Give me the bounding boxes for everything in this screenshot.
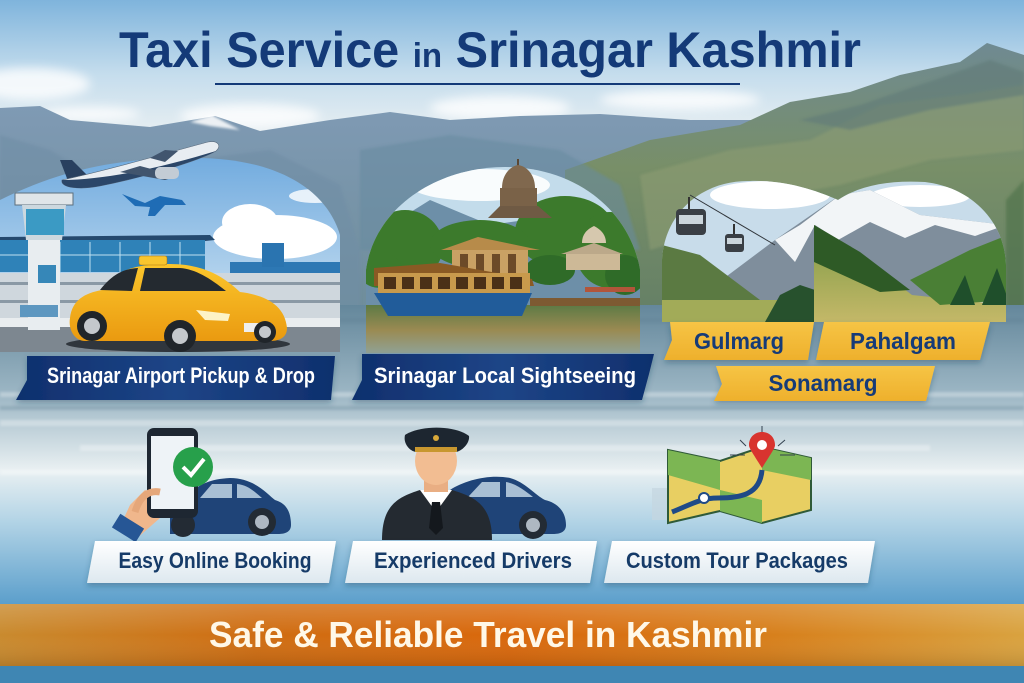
label: custom tour packages: Custom Tour Packages	[626, 548, 848, 573]
panel: hill stations	[660, 175, 1010, 401]
feature: online booking	[87, 428, 336, 583]
label: sightseeing: Srinagar Local Sightseeing	[374, 363, 636, 388]
label: easy online booking: Easy Online Booking	[118, 548, 312, 573]
icon: blue car	[450, 477, 566, 539]
lake and palace scene	[358, 160, 650, 355]
label: Pahalgam: Pahalgam	[850, 328, 956, 354]
label: Pahalgam	[816, 322, 990, 360]
icon: domed temple	[488, 159, 552, 218]
panel: sightseeing	[352, 159, 654, 400]
label: experienced drivers: Experienced Drivers	[374, 548, 572, 573]
label: Gulmarg: Gulmarg	[694, 328, 784, 354]
background: mountains	[0, 43, 1024, 330]
cable car line	[690, 195, 775, 245]
background: sky	[0, 0, 1024, 135]
label: Sonamarg: Sonamarg	[768, 370, 878, 396]
airport scene	[0, 150, 345, 355]
label: Sonamarg	[714, 366, 935, 401]
icon: driver	[382, 428, 492, 540]
label: experienced drivers	[345, 541, 597, 583]
icon: small blue plane	[122, 194, 186, 216]
feature: tour packages	[604, 426, 875, 583]
label: airport	[16, 356, 335, 400]
icon: pavilion	[441, 237, 540, 276]
label: custom tour packages	[604, 541, 875, 583]
label: Gulmarg	[664, 322, 814, 360]
footer banner: Safe & Reliable Travel in Kashmir	[209, 614, 767, 655]
label: airport: Srinagar Airport Pickup & Drop	[47, 363, 315, 388]
icon: map with pin	[652, 426, 811, 523]
icon: houseboat	[374, 263, 640, 316]
icon: yellow taxi	[66, 256, 290, 352]
title: Taxi Service in Srinagar Kashmir	[119, 22, 861, 78]
label: easy online booking	[87, 541, 336, 583]
feature: drivers	[345, 428, 597, 583]
label: sightseeing	[352, 354, 654, 400]
background: clouds	[0, 68, 760, 128]
background: lake	[0, 305, 1024, 605]
icon: white pavilion	[561, 226, 623, 270]
mountain scenes	[660, 175, 1010, 325]
icon: cable car 1	[676, 197, 706, 235]
background: water streaks	[0, 392, 1024, 475]
panel: airport	[0, 142, 345, 355]
icon: hand and phone	[112, 428, 213, 542]
icon: blue car	[170, 478, 291, 537]
footer banner	[0, 604, 1024, 666]
icon: airliner	[60, 142, 219, 188]
icon: cable car 2	[725, 224, 744, 252]
